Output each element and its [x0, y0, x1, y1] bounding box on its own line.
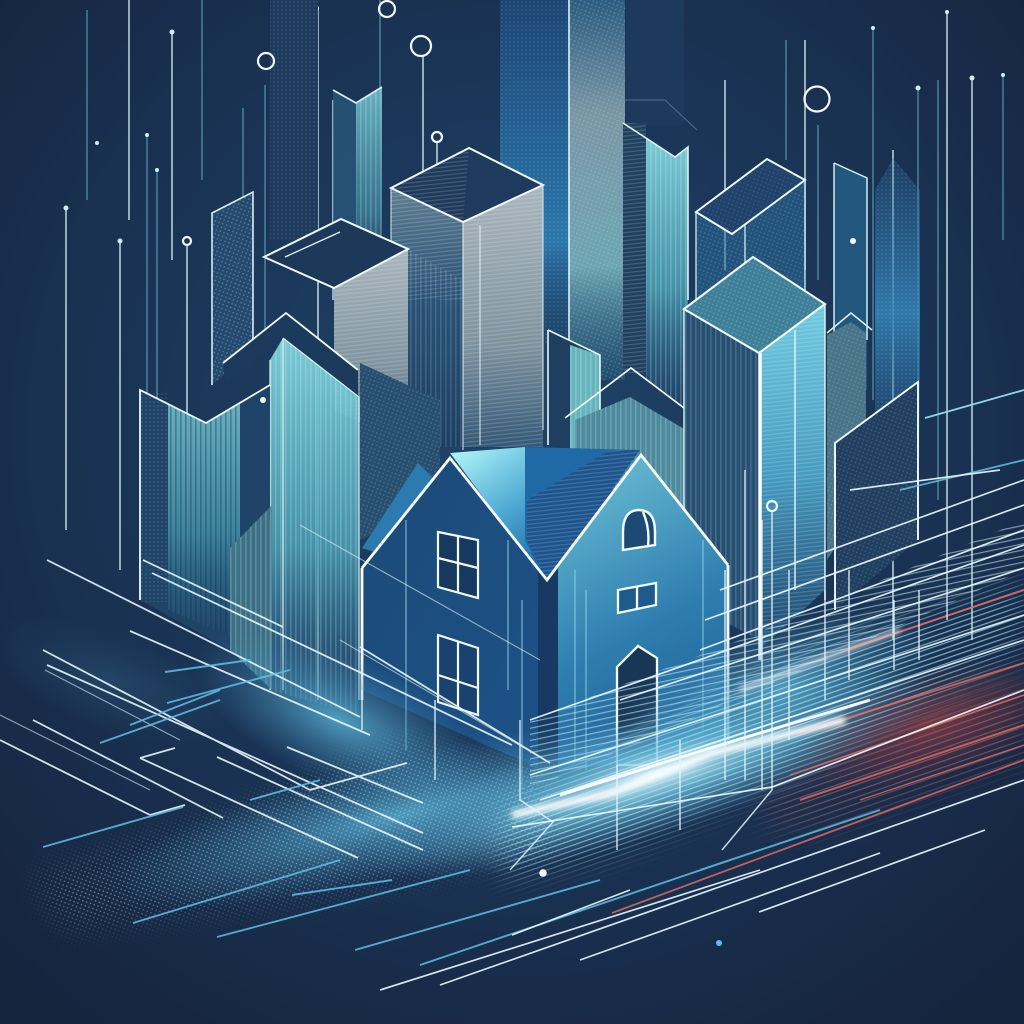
decorative circles [183, 1, 830, 511]
ground lines: bright core [512, 630, 900, 815]
tower: upper right wire box [696, 159, 805, 300]
bright vertical lines [66, 0, 972, 700]
tower: right main glass [684, 257, 825, 660]
house: back gable [362, 463, 450, 560]
red light streaks [612, 590, 1024, 913]
tall back towers [270, 0, 684, 380]
background vertical lines [87, 0, 1003, 500]
window: left lower [438, 635, 478, 715]
tower: far left blue [140, 385, 272, 690]
fine line band: red dither [746, 670, 1024, 848]
tower: left thin [212, 192, 253, 385]
window: left upper [438, 532, 478, 598]
background line tips [64, 6, 1005, 244]
fine line band: light streaks [482, 566, 1024, 894]
fine line band: grid and door area [530, 520, 1024, 790]
house: outline [362, 455, 728, 740]
ground glow [346, 630, 954, 920]
house [362, 447, 728, 790]
ground lines: blue accents [43, 460, 1024, 965]
house: right wall [558, 455, 728, 772]
house: roof left [450, 447, 547, 582]
window: small right [618, 583, 656, 613]
tower: right far blue [875, 158, 920, 470]
ground dots [260, 238, 856, 946]
door [617, 646, 657, 765]
tower: upper right teal [623, 100, 697, 410]
dotted ground field [24, 728, 570, 946]
house: inner wall lines [406, 520, 703, 790]
house: centre shadow [538, 568, 558, 772]
tower: right dark wire [835, 382, 1024, 610]
window: arched [623, 510, 655, 550]
tower: centre small behind house [548, 330, 688, 520]
tower: left teal with notch [223, 313, 359, 715]
tower: centre-left gray [264, 219, 408, 445]
house: roof right [525, 447, 640, 582]
tower: right gray-blue [827, 313, 872, 560]
house: left wall [362, 458, 547, 772]
tower: upper left teal [333, 87, 382, 300]
ground lines: streaks to upper right [380, 470, 1024, 990]
ground lines: perspective toward lower right [0, 525, 550, 858]
tower: right narrow [834, 163, 867, 390]
tower: lower left dark [360, 363, 440, 540]
tower: centre large [391, 148, 543, 450]
vertical grid lines over ground [362, 470, 947, 870]
